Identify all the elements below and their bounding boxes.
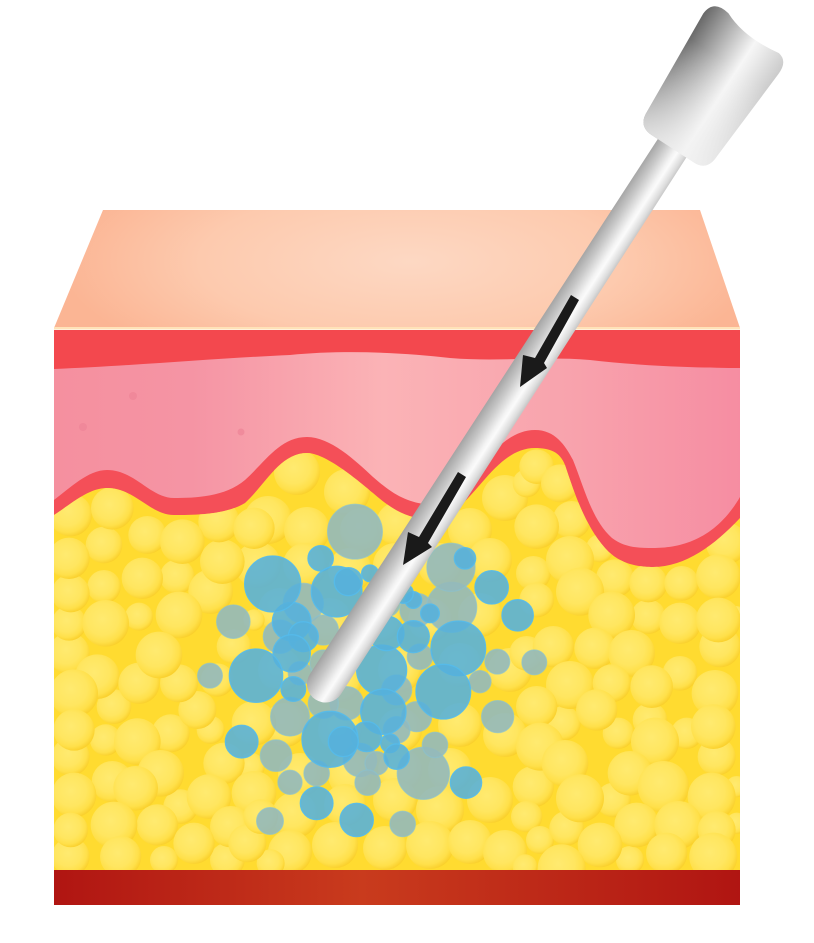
epidermis band: [54, 330, 740, 369]
arrow: lower: [403, 472, 466, 565]
red wavy membrane: [54, 430, 740, 600]
fat cells: right zone: [509, 449, 747, 892]
surface highlight line: [54, 327, 740, 330]
dermis dots: [79, 392, 244, 436]
blue particles cluster: [198, 504, 547, 837]
needle shaft: [300, 132, 691, 710]
gray-green particles: [198, 504, 547, 837]
base muscle layer: [54, 870, 740, 905]
skin surface top: [54, 210, 740, 328]
fat cells: left zone: [48, 487, 285, 877]
fat tissue layer: [48, 440, 747, 892]
needle: [276, 1, 792, 726]
dermis layer: [54, 350, 740, 565]
fat cells: central zone: [235, 449, 532, 874]
arrow: upper: [520, 295, 579, 387]
blue particles: [225, 546, 533, 837]
needle head: [633, 1, 792, 175]
